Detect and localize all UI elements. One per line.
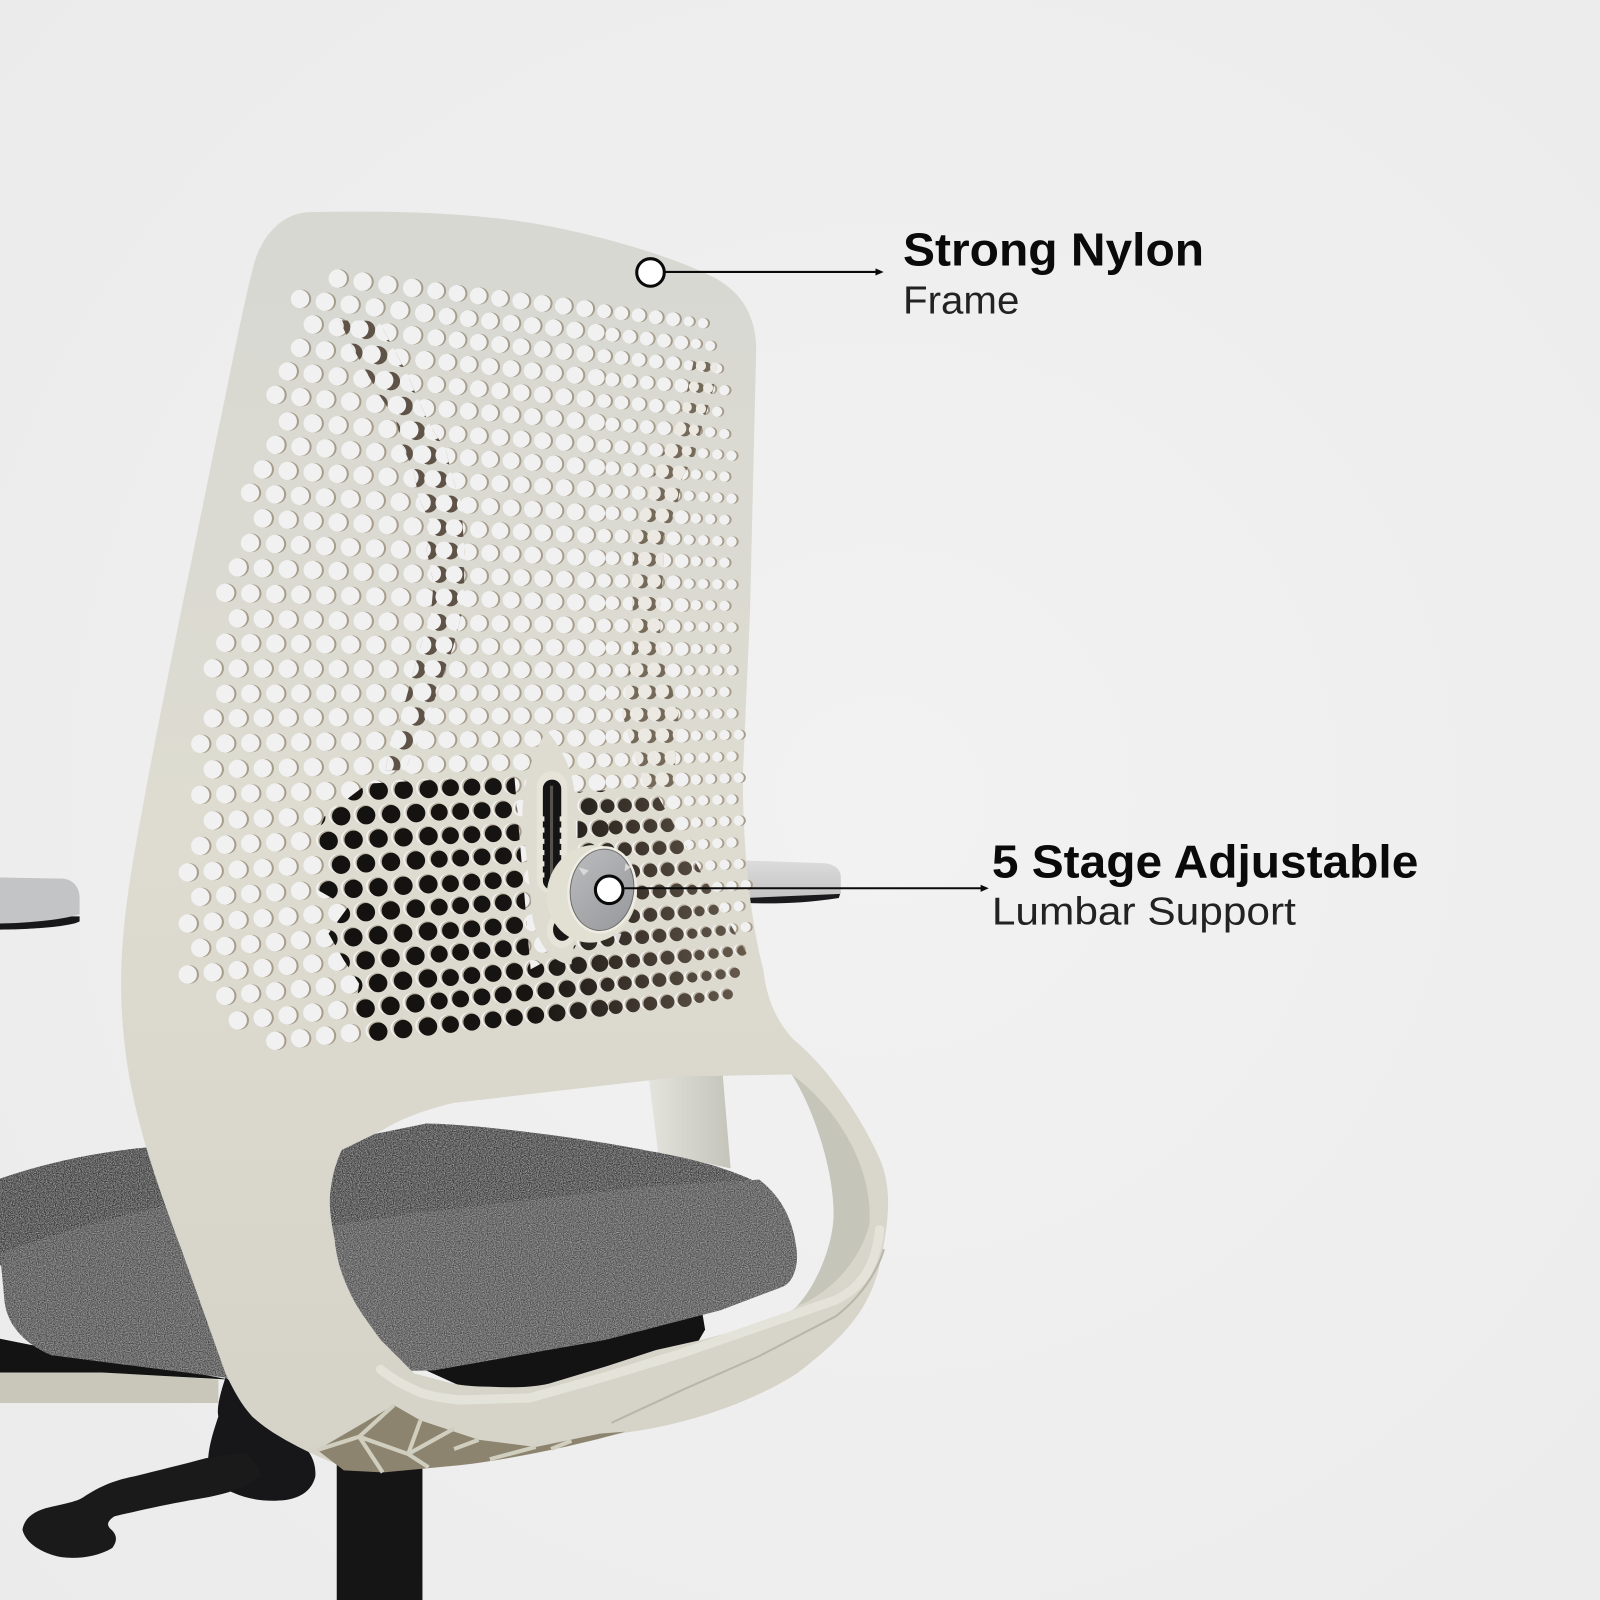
ring lip highlight and groove — [381, 1230, 884, 1422]
tilt lever — [22, 1453, 260, 1558]
callout: lumbar support — [595, 836, 1418, 933]
sub label: Lumbar Support — [992, 890, 1296, 933]
perforated mesh holes — [185, 278, 755, 1042]
right shadow streak — [622, 360, 717, 788]
leader line and arrow — [665, 271, 878, 273]
callout: strong nylon — [637, 223, 1204, 322]
backrest shell — [121, 212, 888, 1467]
ring inner band — [792, 1074, 870, 1306]
left shadow streak — [340, 320, 464, 770]
marker dot — [595, 876, 623, 904]
lumbar knob — [536, 835, 647, 952]
gas cylinder — [337, 1459, 422, 1600]
dark lumbar holes — [318, 776, 746, 1041]
heading: Strong Nylon — [903, 223, 1204, 275]
under-seat mechanism — [0, 1311, 705, 1390]
backrest support post — [648, 1071, 731, 1168]
seat cushion — [0, 1123, 797, 1384]
left armrest — [0, 878, 80, 930]
right armrest — [739, 860, 841, 903]
marker dot — [637, 259, 664, 286]
seat plate, left — [0, 1370, 218, 1403]
cushion right top — [306, 1123, 776, 1235]
cushion left top — [0, 1143, 224, 1286]
lumbar adjustment slot — [537, 771, 576, 948]
swivel housing — [208, 1378, 315, 1501]
lattice underside — [317, 1405, 626, 1472]
base mechanism — [22, 1378, 422, 1600]
lumbar slot surround — [522, 731, 578, 964]
cushion right front — [306, 1180, 797, 1372]
leader line and arrow — [624, 887, 983, 889]
infographic canvas — [0, 212, 1417, 1600]
cushion left front — [0, 1194, 245, 1384]
heading: 5 Stage Adjustable — [992, 836, 1418, 888]
sub label: Frame — [903, 279, 1019, 322]
